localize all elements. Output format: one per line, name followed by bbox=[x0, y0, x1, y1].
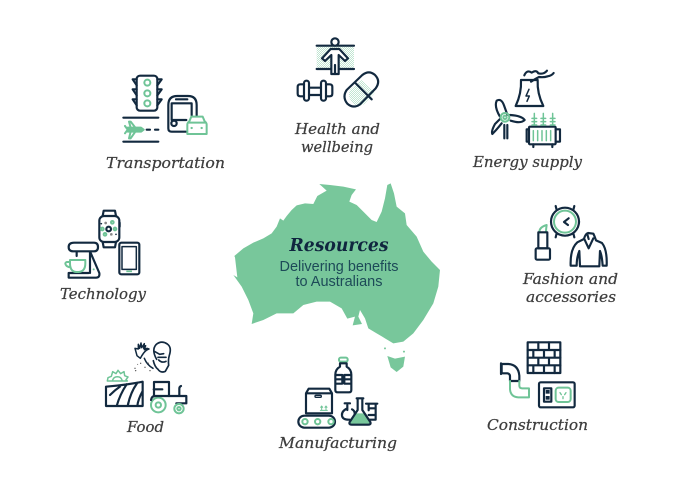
label: Transportation: Transportation bbox=[106, 154, 225, 172]
label: Health and wellbeing: wellbeing bbox=[301, 138, 373, 156]
icon: health and wellbeing bbox=[298, 38, 378, 107]
map of Australia bbox=[233, 183, 440, 372]
label: Manufacturing: Manufacturing bbox=[278, 434, 397, 452]
icon: construction bbox=[501, 342, 575, 407]
label: Construction: Construction bbox=[487, 416, 588, 434]
label: Fashion and accessories: accessories bbox=[526, 288, 616, 306]
map title bbox=[280, 236, 398, 290]
heading: Resources: Resources bbox=[289, 236, 389, 256]
icon: food bbox=[106, 342, 186, 413]
icon: technology bbox=[65, 211, 139, 278]
label: Energy supply: Energy supply bbox=[472, 153, 583, 171]
icon: fashion and accessories bbox=[536, 206, 607, 266]
label: Health and wellbeing bbox=[294, 120, 380, 156]
label: Fashion and accessories bbox=[522, 270, 618, 306]
icon: manufacturing bbox=[298, 358, 377, 428]
subheading line 2: to Australians bbox=[296, 274, 382, 290]
icon: transportation bbox=[123, 76, 207, 142]
subheading line 1: Delivering benefits bbox=[280, 259, 398, 275]
label: Health and wellbeing: Health and bbox=[294, 120, 380, 138]
icon: energy supply bbox=[492, 71, 560, 147]
label: Technology: Technology bbox=[60, 285, 147, 303]
label: Fashion and accessories: Fashion and bbox=[522, 270, 618, 288]
label: Food: Food bbox=[126, 418, 164, 436]
